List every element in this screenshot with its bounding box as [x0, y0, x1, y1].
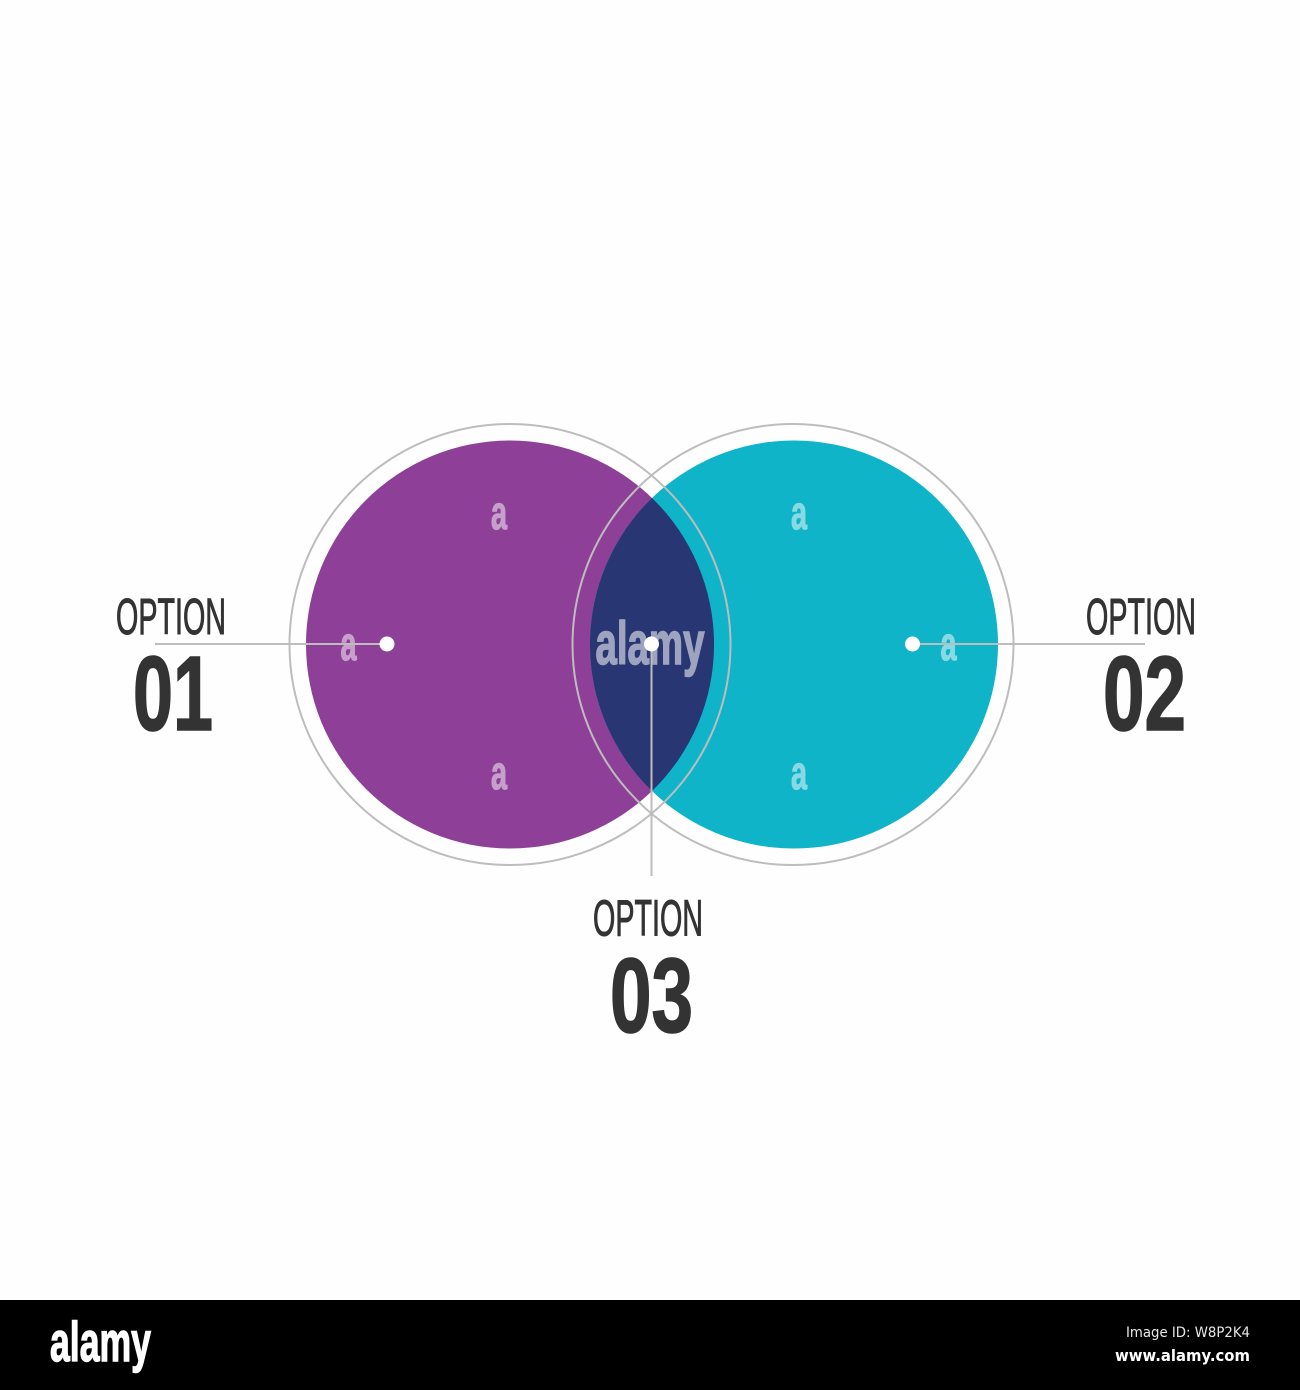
- label: option 02: OPTION: [1086, 588, 1196, 645]
- footer logo: alamy: [50, 1310, 151, 1373]
- dot: option 01: [380, 636, 394, 652]
- label: option 03: [593, 890, 703, 1055]
- label: option 02: 02: [1103, 635, 1186, 753]
- watermark letters: a: [491, 486, 508, 539]
- outer ring: right: [572, 424, 1014, 865]
- overlap: option 03 navy lens: [590, 498, 714, 791]
- label: option 01: OPTION: [116, 588, 226, 645]
- label: option 02: [1086, 588, 1196, 753]
- watermark letters: a: [791, 746, 808, 799]
- dot: option 02: [905, 636, 920, 652]
- label: option 01: 01: [133, 635, 213, 753]
- footer bar: [0, 1300, 1300, 1390]
- venn diagram: [290, 424, 1014, 865]
- label: option 03: OPTION: [593, 890, 703, 946]
- watermark letters: a: [791, 486, 808, 539]
- watermark letters: a: [940, 617, 957, 670]
- watermark letters: [340, 486, 957, 799]
- label: option 01: [116, 588, 226, 753]
- watermark: alamy centre: alamy: [596, 610, 705, 677]
- dot: option 03: [644, 636, 659, 652]
- footer url: www.alamy.com: [1115, 1346, 1250, 1365]
- label: option 03: 03: [610, 937, 693, 1055]
- watermark letters: a: [340, 617, 357, 670]
- circle: option 02 teal: [590, 440, 998, 848]
- leader line: option 01: [155, 643, 387, 645]
- circle: option 01 purple: [306, 440, 714, 848]
- leader line: option 03: [650, 644, 652, 876]
- footer image id: Image ID: W8P2K4: [1126, 1325, 1250, 1341]
- watermark letters: a: [491, 746, 508, 799]
- outer ring: left: [290, 424, 730, 865]
- leader line: option 02: [912, 643, 1145, 645]
